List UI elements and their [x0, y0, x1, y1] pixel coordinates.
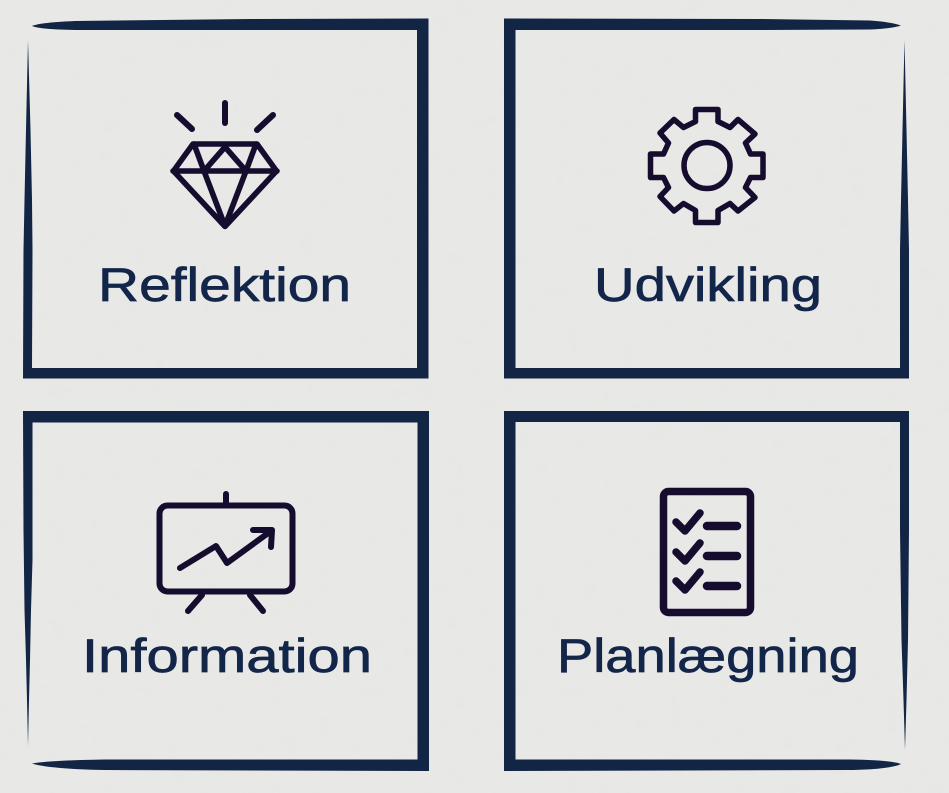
label: Udvikling: Udvikling: [594, 258, 822, 311]
frame: Information: [23, 411, 429, 771]
frame: Planlægning: [504, 411, 909, 771]
label: Information: Information: [82, 629, 372, 682]
icon: checklist: [664, 492, 750, 612]
panel: Reflektion: [23, 18, 428, 378]
label: Reflektion: Reflektion: [98, 258, 351, 311]
panel: Planlægning: [504, 411, 909, 771]
panel: Information: [23, 411, 429, 771]
frame: Udvikling: [504, 18, 909, 378]
icon: presentation chart: [160, 494, 292, 611]
frame: Reflektion: [23, 18, 428, 378]
icon: gear: [650, 110, 763, 222]
icon: diamond: [173, 103, 277, 226]
panel: Udvikling: [504, 18, 909, 378]
label: Planlægning: Planlægning: [557, 629, 859, 682]
